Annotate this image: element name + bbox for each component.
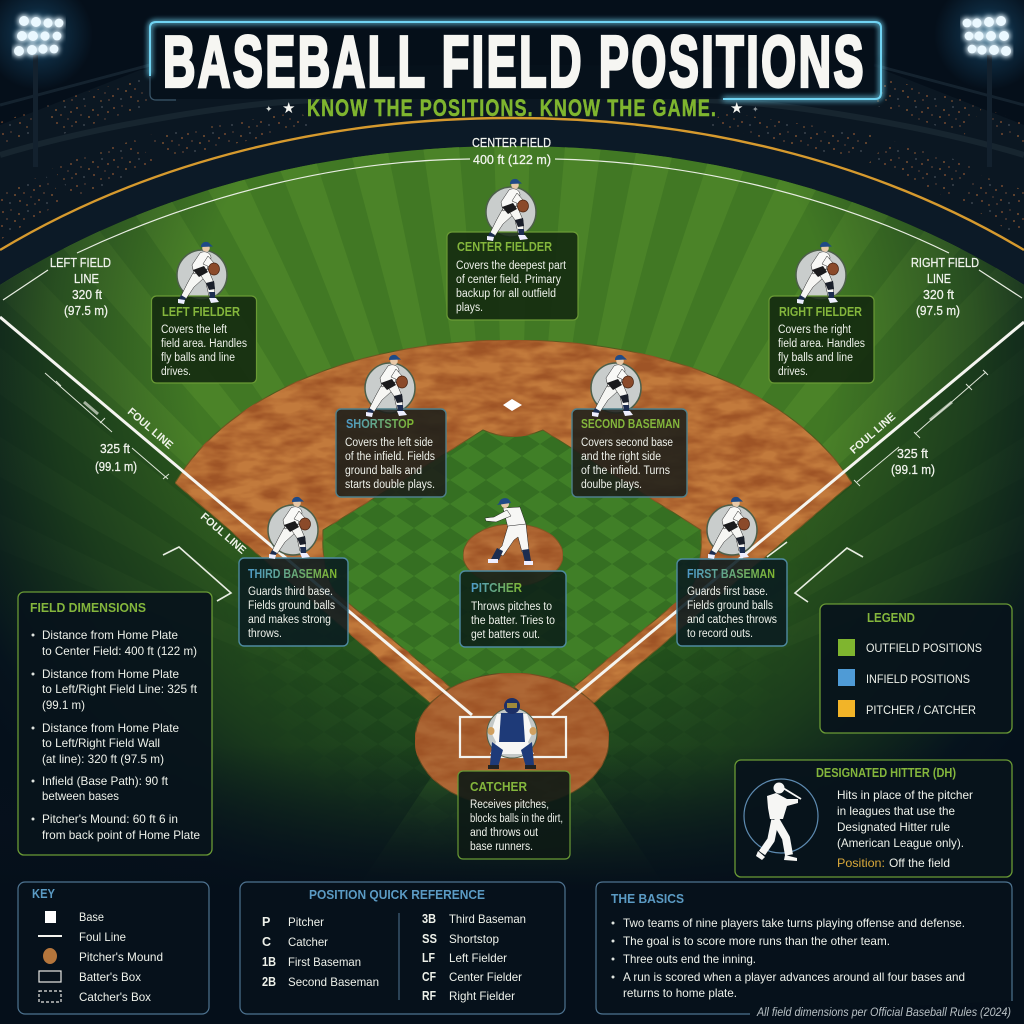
panel: legend: LEGEND bbox=[867, 610, 915, 625]
panel: key: Base bbox=[79, 910, 104, 924]
panel: third baseman: throws. bbox=[248, 628, 282, 640]
panel: center fielder: CENTER FIELDER bbox=[457, 239, 553, 254]
panel: left fielder: LEFT FIELDER bbox=[162, 304, 241, 319]
grass field bbox=[0, 146, 1024, 864]
panel: shortstop: starts double plays. bbox=[345, 479, 435, 491]
distance labels: (99.1 m) bbox=[95, 460, 137, 474]
distance labels: CENTER FIELD bbox=[472, 136, 551, 150]
panel: right fielder: fly balls and line bbox=[778, 352, 853, 364]
panel: first baseman: and catches throws bbox=[687, 614, 777, 626]
panel: position quick reference: Second Baseman bbox=[288, 975, 379, 989]
panel: third baseman: THIRD BASEMAN bbox=[248, 566, 337, 581]
icon: batter silhouette bbox=[744, 779, 818, 861]
left foul line bbox=[0, 317, 472, 715]
home plate dirt circle bbox=[415, 673, 609, 807]
panel: third baseman: and makes strong bbox=[248, 614, 331, 626]
panel: position quick reference: Left Fielder bbox=[449, 951, 507, 965]
panel: pitcher bbox=[460, 498, 566, 647]
panel: designated hitter: (American League only). bbox=[837, 836, 964, 850]
foul line labels bbox=[125, 406, 898, 557]
panel: position quick reference: Center Fielder bbox=[449, 970, 522, 984]
panel: field dimensions: (at line): 320 ft (97.5 m) bbox=[42, 752, 164, 766]
panel: position quick reference: Pitcher bbox=[288, 915, 324, 929]
panel: the basics: returns to home plate. bbox=[623, 986, 737, 1000]
panel: shortstop: ground balls and bbox=[345, 465, 422, 477]
panel: center fielder: backup for all outfield bbox=[456, 288, 556, 300]
second base bbox=[503, 399, 522, 411]
subtitle: ★ bbox=[282, 100, 295, 117]
panel: left fielder: Covers the left bbox=[161, 324, 228, 336]
panel: designated hitter: DESIGNATED HITTER (DH) bbox=[816, 765, 956, 780]
panel: position quick reference: Right Fielder bbox=[449, 989, 515, 1003]
panel: second baseman: of the infield. Turns bbox=[581, 465, 670, 477]
subtitle: ✦ bbox=[265, 104, 273, 114]
panel: center fielder bbox=[447, 179, 578, 320]
panel: second baseman: doulbe plays. bbox=[581, 479, 642, 491]
panel: position quick reference: 2B bbox=[262, 975, 276, 989]
panel: the basics bbox=[596, 882, 1012, 1014]
panel: field dimensions: to Center Field: 400 ft (122 m) bbox=[42, 644, 197, 658]
panel: key: Batter's Box bbox=[79, 970, 141, 984]
left light tower bbox=[0, 0, 93, 167]
panel: position quick reference: C bbox=[262, 935, 271, 949]
subtitle: KNOW THE POSITIONS. KNOW THE GAME. bbox=[307, 95, 717, 122]
icon: batter's box bbox=[39, 971, 61, 982]
panel: center fielder: of center field. Primary bbox=[456, 274, 561, 286]
panel: second baseman bbox=[572, 355, 687, 497]
footnote: All field dimensions per Official Baseball Rules (2024) bbox=[756, 1007, 1011, 1019]
panel: position quick reference bbox=[240, 882, 565, 1014]
panel: position quick reference: First Baseman bbox=[288, 955, 361, 969]
panel: designated hitter: Designated Hitter rule bbox=[837, 820, 950, 834]
panel: position quick reference: P bbox=[262, 915, 270, 929]
panel: second baseman: Covers second base bbox=[581, 437, 673, 449]
infield dirt bbox=[175, 340, 852, 703]
panel: field dimensions: Distance from Home Plate bbox=[42, 667, 179, 681]
panel: right fielder: Covers the right bbox=[778, 324, 852, 336]
panel: field dimensions: Pitcher's Mound: 60 ft 6 in bbox=[42, 812, 178, 826]
foul line labels: FOUL LINE bbox=[125, 406, 175, 452]
panel: field dimensions: Distance from Home Plate bbox=[42, 721, 179, 735]
panel: position quick reference: Shortstop bbox=[449, 932, 499, 946]
panel: first baseman: to record outs. bbox=[687, 628, 753, 640]
panel: field dimensions: FIELD DIMENSIONS bbox=[30, 600, 146, 615]
panel: designated hitter: Off the field bbox=[889, 856, 950, 870]
subtitle: ★ bbox=[730, 100, 743, 117]
icon: mound bbox=[43, 948, 57, 964]
panel: left fielder: field area. Handles bbox=[161, 338, 247, 350]
panel: legend: OUTFIELD POSITIONS bbox=[866, 641, 982, 655]
panel: catcher: blocks balls in the dirt, bbox=[470, 813, 563, 825]
panel: key: Catcher's Box bbox=[79, 990, 151, 1004]
panel: the basics: Three outs end the inning. bbox=[623, 952, 756, 966]
panel: field dimensions: Distance from Home Plate bbox=[42, 628, 178, 642]
panel: the basics: The goal is to score more runs than the other team. bbox=[623, 934, 890, 948]
distance labels: 320 ft bbox=[923, 288, 955, 302]
panel: shortstop: SHORTSTOP bbox=[346, 416, 414, 431]
panel: legend: INFIELD POSITIONS bbox=[866, 672, 970, 686]
panel: the basics: Two teams of nine players take turns playing offense and defense. bbox=[623, 916, 965, 930]
distance labels: 325 ft bbox=[100, 442, 130, 456]
panel: designated hitter: Position: bbox=[837, 856, 885, 870]
panel: first baseman: Guards first base. bbox=[687, 586, 768, 598]
icon: catcher's box bbox=[39, 991, 61, 1002]
panel: center fielder: Covers the deepest part bbox=[456, 260, 567, 272]
panel: shortstop bbox=[336, 355, 446, 497]
panel: key bbox=[18, 882, 209, 1014]
panel: left fielder: fly balls and line bbox=[161, 352, 235, 364]
panel: third baseman: Guards third base. bbox=[248, 586, 333, 598]
panel: field dimensions bbox=[18, 592, 212, 855]
panel: first baseman bbox=[677, 497, 787, 646]
distance labels: 400 ft (122 m) bbox=[473, 153, 551, 167]
pitcher's mound bbox=[463, 524, 563, 586]
panel: key: Pitcher's Mound bbox=[79, 950, 163, 964]
outfield distance line bbox=[3, 159, 1022, 300]
panel: the basics: THE BASICS bbox=[611, 891, 684, 906]
panel: left fielder bbox=[152, 242, 256, 383]
panel: position quick reference: Third Baseman bbox=[449, 912, 526, 926]
panel: designated hitter: Hits in place of the pitcher bbox=[837, 788, 973, 802]
panel: shortstop: of the infield. Fields bbox=[345, 451, 435, 463]
distance labels: (99.1 m) bbox=[891, 463, 935, 477]
panel: catcher: CATCHER bbox=[470, 779, 528, 794]
panel: catcher: base runners. bbox=[470, 841, 533, 853]
distance labels: LINE bbox=[927, 272, 951, 286]
distance labels: RIGHT FIELD bbox=[911, 256, 979, 270]
panel: position quick reference: CF bbox=[422, 970, 436, 984]
panel: field dimensions: from back point of Home Plate bbox=[42, 828, 200, 842]
panel: field dimensions: to Left/Right Field Wall bbox=[42, 736, 160, 750]
panel: legend bbox=[820, 604, 1012, 733]
panel: right fielder: RIGHT FIELDER bbox=[779, 304, 863, 319]
panel: catcher bbox=[458, 698, 570, 859]
panel: shortstop: Covers the left side bbox=[345, 437, 433, 449]
panel: position quick reference: 3B bbox=[422, 912, 436, 926]
foul line labels: FOUL LINE bbox=[848, 411, 898, 457]
panel: catcher: Receives pitches, bbox=[470, 799, 549, 811]
panel: field dimensions: (99.1 m) bbox=[42, 698, 85, 712]
foul line labels: FOUL LINE bbox=[198, 511, 248, 557]
right foul line bbox=[552, 322, 1024, 715]
panel: key: KEY bbox=[32, 886, 55, 901]
distance labels: 320 ft bbox=[72, 288, 102, 302]
panel: right fielder: field area. Handles bbox=[778, 338, 865, 350]
panel: pitcher: PITCHER bbox=[471, 580, 523, 595]
panel: field dimensions: Infield (Base Path): 90 ft bbox=[42, 774, 169, 788]
panel: position quick reference: Catcher bbox=[288, 935, 328, 949]
distance labels: LEFT FIELD bbox=[50, 256, 111, 270]
panel: second baseman: SECOND BASEMAN bbox=[581, 416, 680, 431]
distance labels: 325 ft bbox=[897, 447, 929, 461]
panel: position quick reference: LF bbox=[422, 951, 435, 965]
panel: the basics: A run is scored when a player advances around all four bases and bbox=[623, 970, 965, 984]
left 325 ft dimension line bbox=[45, 373, 169, 479]
foul territory corner brackets bbox=[163, 542, 863, 602]
right 325 ft dimension line bbox=[854, 370, 988, 486]
panel: pitcher: the batter. Tries to bbox=[471, 615, 555, 627]
panel: position quick reference: SS bbox=[422, 932, 437, 946]
panel: field dimensions: to Left/Right Field Line: 325 ft bbox=[42, 682, 198, 696]
outfield wall bbox=[0, 118, 1024, 285]
panel: key: Foul Line bbox=[79, 930, 126, 944]
panel: pitcher: Throws pitches to bbox=[471, 601, 552, 613]
panel: first baseman: FIRST BASEMAN bbox=[687, 566, 775, 581]
icon: catcher figure bbox=[487, 698, 537, 769]
batter's box bbox=[460, 717, 566, 757]
subtitle: ✦ bbox=[752, 105, 759, 114]
panel: legend: PITCHER / CATCHER bbox=[866, 703, 976, 717]
icon: foul line bbox=[38, 935, 62, 937]
panel: catcher: and throws out bbox=[470, 827, 539, 839]
panel: third baseman: Fields ground balls bbox=[248, 600, 335, 612]
panel: right fielder: drives. bbox=[778, 366, 808, 378]
panel: left fielder: drives. bbox=[161, 366, 191, 378]
panel: designated hitter: in leagues that use the bbox=[837, 804, 955, 818]
distance labels bbox=[50, 136, 979, 477]
icon: pitcher figure bbox=[485, 498, 533, 565]
distance labels: LINE bbox=[74, 272, 99, 286]
panel: first baseman: Fields ground balls bbox=[687, 600, 773, 612]
panel: right fielder bbox=[769, 242, 874, 383]
distance labels: (97.5 m) bbox=[916, 304, 960, 318]
panel: position quick reference: RF bbox=[422, 989, 436, 1003]
panel: position quick reference: 1B bbox=[262, 955, 276, 969]
panel: third baseman bbox=[239, 497, 348, 646]
panel: second baseman: and the right side bbox=[581, 451, 661, 463]
stadium stands bbox=[0, 65, 1024, 250]
panel: pitcher: get batters out. bbox=[471, 629, 540, 641]
icon: base bbox=[45, 911, 56, 923]
distance labels: (97.5 m) bbox=[64, 304, 108, 318]
panel: designated hitter bbox=[735, 760, 1012, 877]
panel: field dimensions: between bases bbox=[42, 789, 119, 803]
right light tower bbox=[934, 0, 1024, 167]
panel: center fielder: plays. bbox=[456, 302, 483, 314]
panel: position quick reference: POSITION QUICK REFERENCE bbox=[309, 887, 485, 902]
